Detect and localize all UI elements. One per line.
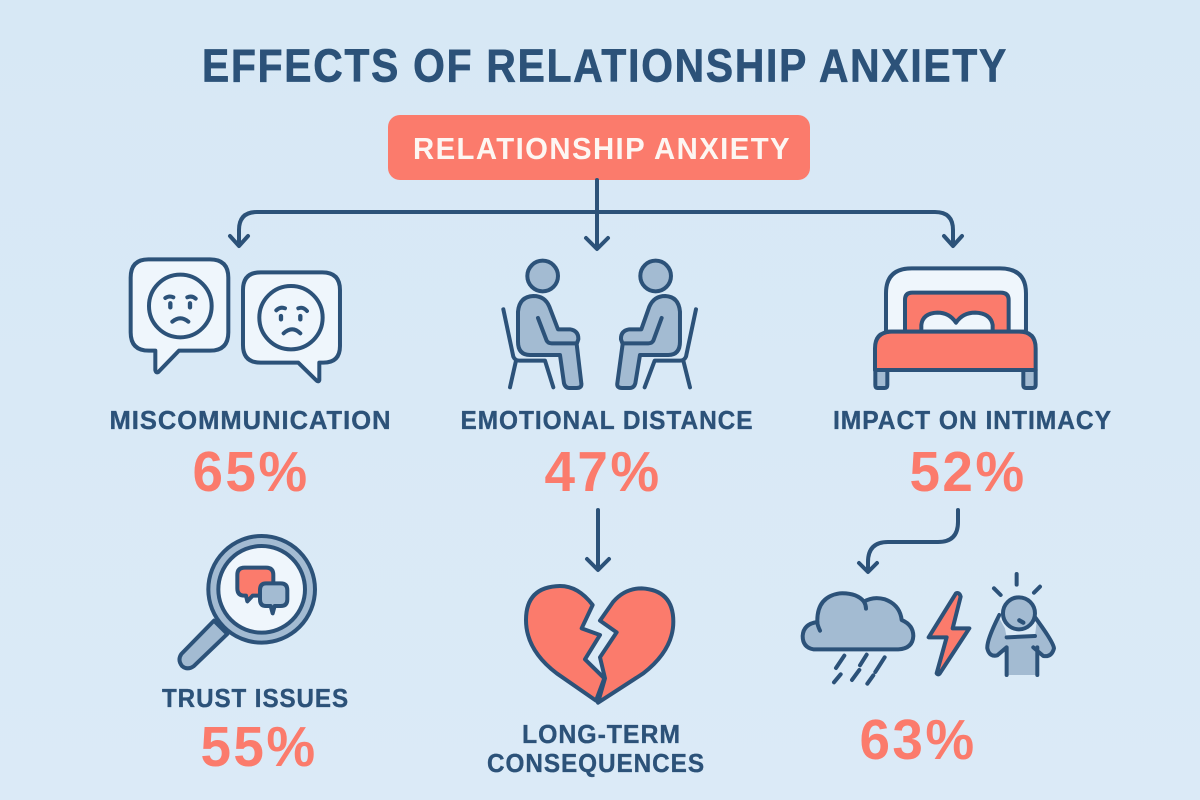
root box: relationship anxiety: RELATIONSHIP ANXIETY: [413, 131, 791, 166]
icon: two seated people: [503, 261, 696, 388]
icon: magnifying glass with chat bubbles: [179, 536, 315, 668]
icon: storm and stressed person: [803, 574, 1054, 684]
icon: sad speech bubbles: [131, 259, 340, 381]
label: impact on intimacy: IMPACT ON INTIMACY: [833, 405, 1112, 435]
label: long-term consequences: CONSEQUENCES: [487, 748, 705, 778]
label: long-term consequences: LONG-TERM: [522, 719, 681, 749]
icon: bed: [875, 268, 1036, 388]
arrow: emotional distance to consequences: [587, 510, 609, 570]
icon: broken heart: [526, 586, 673, 703]
rain: [834, 655, 885, 684]
stat: 52%: 52%: [910, 440, 1026, 504]
label: miscommunication: MISCOMMUNICATION: [110, 405, 392, 435]
title: EFFECTS OF RELATIONSHIP ANXIETY: [202, 40, 1008, 92]
label: long-term consequences: [487, 719, 705, 778]
lightning: [929, 593, 969, 674]
arrow: intimacy to stress: [859, 510, 958, 572]
arrows: root to three effects: [230, 180, 962, 249]
root box: relationship anxiety: [388, 115, 810, 180]
label: trust issues: TRUST ISSUES: [162, 683, 349, 713]
cloud: [803, 593, 913, 649]
stat: 65%: 65%: [192, 440, 310, 504]
left person: [503, 261, 581, 388]
right person: [617, 261, 696, 388]
stat: 47%: 47%: [544, 440, 662, 504]
stressed person: [994, 574, 1040, 595]
stat: 63%: 63%: [860, 708, 976, 772]
label: emotional distance: EMOTIONAL DISTANCE: [460, 405, 754, 435]
stat: 55%: 55%: [200, 715, 318, 779]
